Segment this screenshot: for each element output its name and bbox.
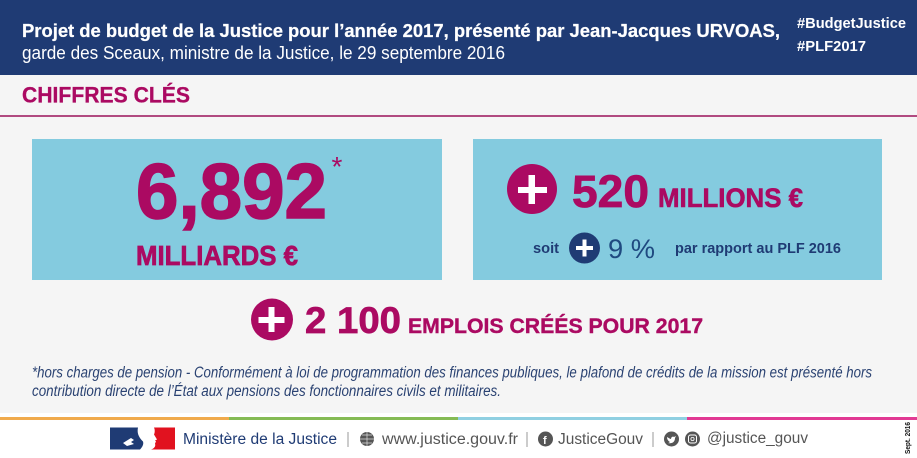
unit millions: MILLIONS € <box>658 183 803 213</box>
ministry name: Ministère de la Justice <box>183 431 337 448</box>
text par rapport: par rapport au PLF 2016 <box>675 240 841 257</box>
panel: 520 millions <box>473 139 882 280</box>
header title: Projet de budget de la Justice pour l’année 2017, présenté par Jean-Jacques URVOAS, <box>22 20 780 41</box>
footer <box>0 413 917 458</box>
panel: 6,892 milliards <box>32 139 442 280</box>
logo: Marianne flag <box>110 428 175 450</box>
text emplois créés: EMPLOIS CRÉÉS POUR 2017 <box>408 313 703 338</box>
footnote <box>32 364 872 400</box>
twitter handle: @justice_gouv <box>707 430 808 447</box>
icon: twitter <box>664 432 679 446</box>
key figure 6,892: 6,892 <box>136 147 327 235</box>
asterisk: * <box>332 151 342 182</box>
icon: globe <box>360 432 374 446</box>
icon: plus navy <box>569 232 600 264</box>
section heading: CHIFFRES CLÉS <box>22 82 190 108</box>
jobs figure <box>251 298 703 341</box>
footnote: contribution directe de l’État aux pensions des fonctionnaires civils et militaires. <box>32 383 501 400</box>
figure 2 100: 2 100 <box>305 300 401 341</box>
unit milliards: MILLIARDS € <box>136 240 298 271</box>
icon: facebook: f <box>543 435 547 447</box>
website: www.justice.gouv.fr <box>381 431 518 448</box>
icon: plus jobs <box>251 298 293 340</box>
date note: Sept. 2016 <box>905 422 912 454</box>
icon: plus magenta <box>507 164 557 214</box>
figure 9 percent: 9 % <box>608 234 655 264</box>
colour strip <box>0 417 917 420</box>
icon: instagram <box>685 432 700 446</box>
text soit: soit <box>533 240 559 257</box>
figure 520: 520 <box>572 166 649 217</box>
hashtag budget justice: #BudgetJustice <box>797 16 906 32</box>
header subtitle: garde des Sceaux, ministre de la Justice, le 29 septembre 2016 <box>22 43 505 63</box>
icon: facebook <box>538 432 553 447</box>
facebook handle: JusticeGouv <box>558 431 643 448</box>
hashtag PLF2017: #PLF2017 <box>797 39 866 55</box>
header banner <box>0 0 917 75</box>
